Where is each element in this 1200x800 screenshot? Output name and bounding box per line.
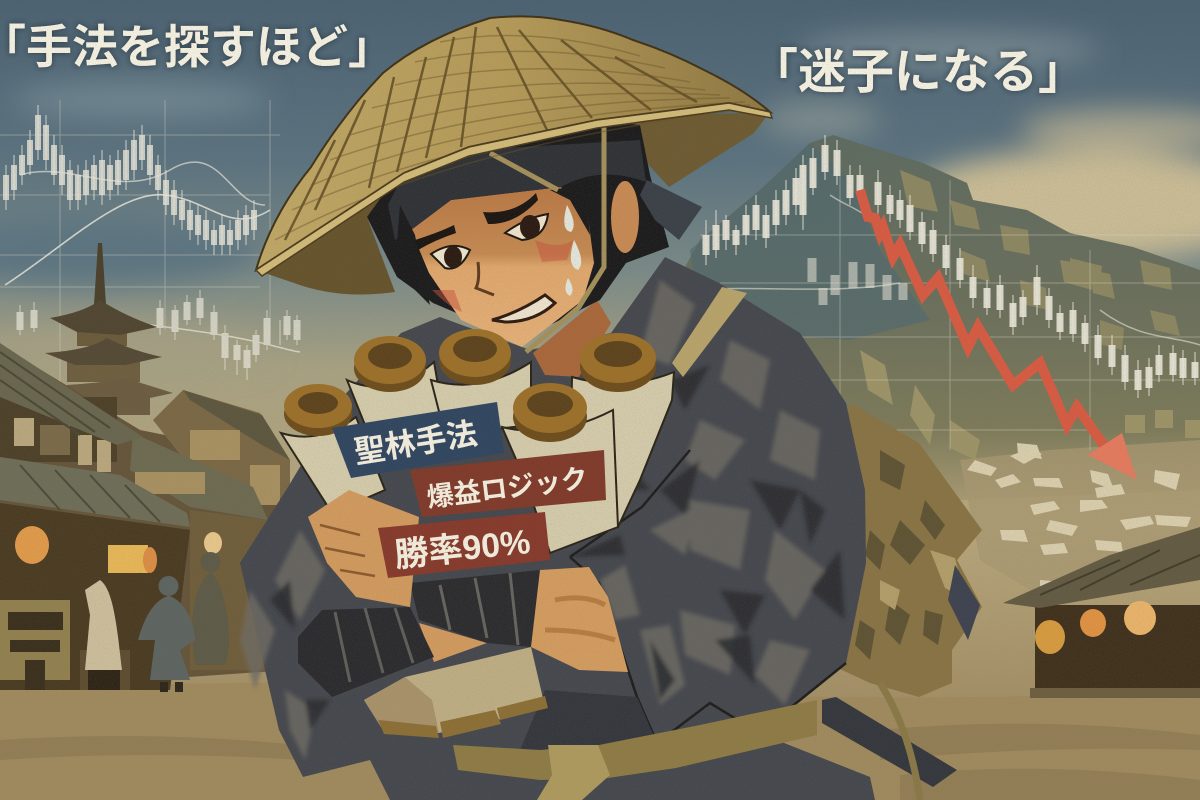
label: 聖林手法: 聖林手法 [352,416,480,470]
fringe [395,185,590,305]
right hut [1003,527,1200,698]
mouth [492,295,555,322]
hat underside right [600,112,770,187]
label: 爆益ロジック: 爆益ロジック [425,463,590,513]
backpack strap [672,287,747,377]
under-arm skin [419,623,487,662]
label: 勝率90%: 勝率90% [393,523,532,575]
label: 勝率90% [378,512,550,578]
headband [388,140,646,240]
title right: 「迷子になる」 [750,46,1086,99]
backpack [810,403,982,697]
scroll ends [284,337,656,442]
candlestick chart: upper left [5,105,270,285]
rubble field [960,440,1200,590]
eyes [431,246,470,269]
bottom scrolls [364,647,545,733]
robe body [240,257,875,800]
head [367,120,702,352]
label: 爆益ロジック [410,450,606,517]
traveller figure [240,112,982,800]
hair back [367,120,669,340]
forearm wrap right [410,570,540,647]
headband tail [640,180,702,240]
hand [308,490,419,607]
pagoda [45,243,173,415]
arms [298,490,628,697]
left town buildings [0,343,290,690]
forearm skin [531,567,628,672]
sleeve edge [570,557,846,743]
candlestick chart: mountain ridge [700,135,1200,398]
townspeople [85,552,229,692]
ear [611,181,639,253]
chin cord [490,123,604,352]
straw hat [256,16,772,276]
nose [476,262,494,295]
candlestick chart: lower left [20,290,300,380]
hat underside left [256,173,404,295]
title right: 「迷子になる」 [750,46,1086,99]
neck [533,300,611,377]
sweat drops [564,205,574,232]
scroll bundle [281,329,674,553]
lower robe centre [520,690,657,750]
brows [415,225,456,250]
forearm wrap left [298,607,434,697]
mountain [650,135,1200,500]
red falling arrow [860,190,1137,480]
belt [453,700,817,780]
robe pattern [240,280,845,760]
label: 聖林手法 [332,402,504,478]
grid lines [0,100,1200,450]
face [411,187,594,347]
